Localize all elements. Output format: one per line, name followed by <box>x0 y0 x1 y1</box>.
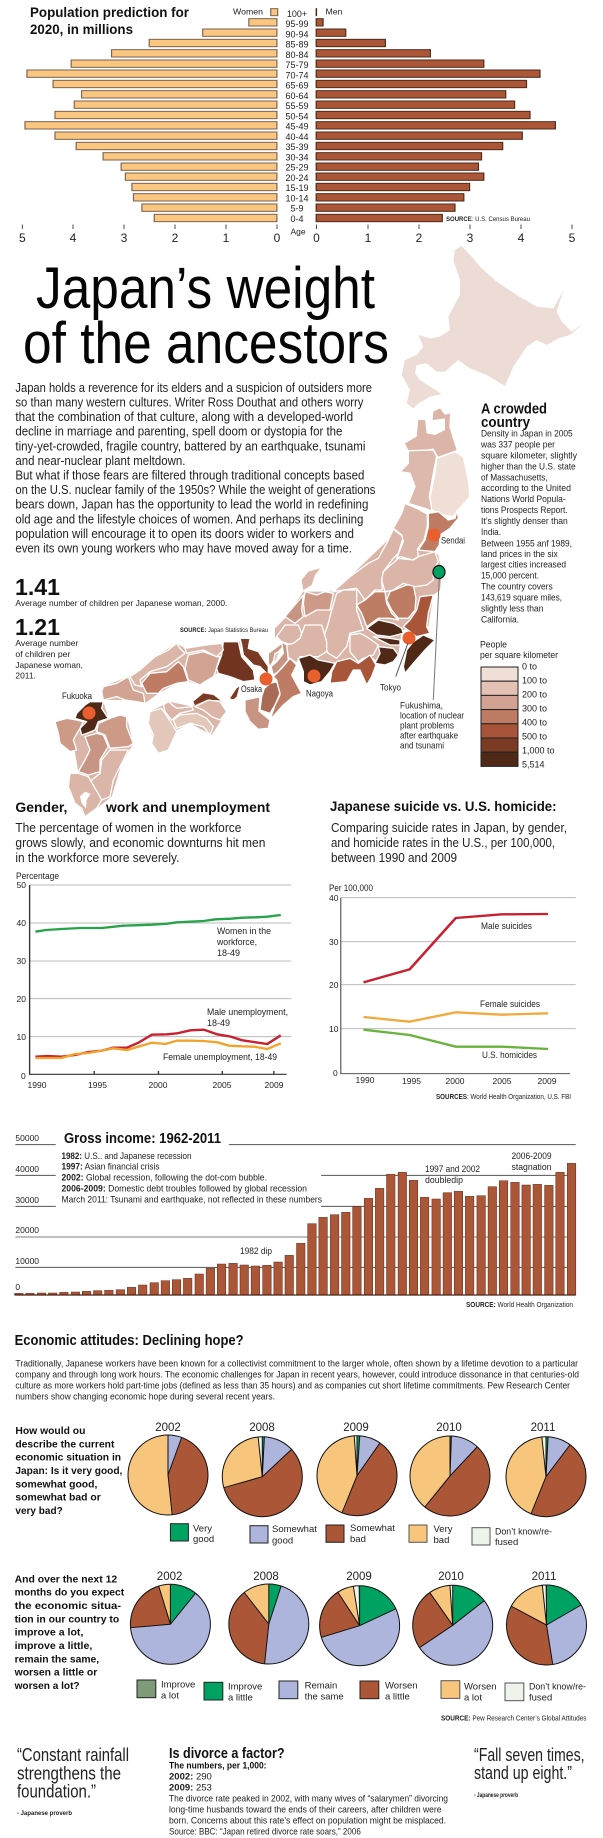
stat: 1.21 children: Japanese woman, <box>15 660 83 670</box>
legend row 2: Remain <box>305 1680 337 1692</box>
pyramid age labels: 60-64 <box>285 91 309 101</box>
sidebar: A crowded country: A crowded <box>481 402 547 418</box>
map: city labels: Sendai <box>441 536 465 546</box>
question 2: improve a lot, <box>15 1627 83 1639</box>
pyramid age labels: 90-94 <box>285 30 309 40</box>
intro text <box>15 380 376 556</box>
section: gender, work and unemployment <box>15 799 291 1090</box>
question 2: And over the next 12 <box>15 1573 117 1585</box>
sidebar: A crowded country: slightly less than <box>481 604 544 614</box>
quote: constant rainfall: foundation.” <box>17 1781 96 1801</box>
y axis labels: 50000 <box>15 1133 39 1143</box>
sidebar: A crowded country: country <box>481 415 530 431</box>
line chart: Per 100,000 <box>329 883 373 893</box>
pyramid axes: 4 <box>70 231 77 245</box>
chart annotations: 1982 dip <box>240 1246 272 1257</box>
sidebar: A crowded country: 15,000 percent. <box>481 570 539 582</box>
legend row 2: a lot <box>464 1692 482 1704</box>
legend row 1: good <box>193 1534 214 1545</box>
source: SOURCE: World Health Organization <box>466 1302 573 1309</box>
sidebar: A crowded country: India. <box>481 527 501 538</box>
quote: fall seven times: - Japanese proverb <box>474 1792 518 1799</box>
intro text: and near-nuclear plant meltdown. <box>15 453 185 468</box>
density legend: 1,000 to <box>522 746 555 756</box>
density legend: 400 to <box>522 718 547 728</box>
line chart: 10 <box>329 1024 339 1034</box>
map: southern Tohoku <box>333 503 458 600</box>
intro text: even its own young workers who may have moved away for a time. <box>15 541 352 556</box>
recession notes: 1997: Asian financial crisis <box>62 1162 160 1172</box>
map of Japan by population density <box>55 246 583 817</box>
legend row 1: Very <box>193 1524 212 1534</box>
sidebar: A crowded country: The country covers <box>481 581 553 592</box>
legend row 1: good <box>272 1536 293 1546</box>
pyramid age labels: 45-49 <box>285 122 309 132</box>
stat: 1.21 children <box>15 614 83 680</box>
pyramid heading: Population prediction for <box>30 4 190 20</box>
pyramid heading: 2020, in millions <box>30 21 133 37</box>
panel: is divorce a factor: born. Concerns about this rate’s effect on population might be misplaced. <box>169 1815 446 1825</box>
pyramid axes <box>19 224 576 245</box>
line chart: Female unemployment, 18-49 <box>163 1052 277 1062</box>
pie row 2: 2009: 2009 <box>346 1571 372 1583</box>
population pyramid <box>19 4 576 245</box>
map: Fukushima marker and leader lines <box>396 566 445 700</box>
sidebar: A crowded country: according to the United <box>481 483 571 494</box>
line chart <box>329 883 576 1086</box>
title <box>23 256 389 376</box>
question 1: describe the current <box>15 1438 115 1450</box>
line chart: Male suicides <box>481 921 532 931</box>
stat: 1.41 children <box>15 574 227 608</box>
legend row 1: Somewhat <box>350 1523 395 1534</box>
pyramid bars: women <box>25 9 278 222</box>
line chart: 30 <box>329 937 339 947</box>
pyramid age labels: 40-44 <box>285 132 309 142</box>
legend row 2: Improve <box>228 1682 262 1692</box>
pie row 1: 2011 <box>506 1422 586 1517</box>
legend row 2: fused <box>529 1692 552 1704</box>
panel: is divorce a factor: long-time husbands toward the ends of their careers, after children were <box>169 1805 442 1815</box>
sidebar: A crowded country <box>480 402 577 625</box>
pie row 2: 2011: 2011 <box>532 1571 556 1583</box>
panel: is divorce a factor: Is divorce a factor? <box>169 1746 285 1762</box>
pie row 1: 2009: 2009 <box>343 1422 369 1434</box>
map: Fukushima label: after earthquake <box>400 730 458 740</box>
map: Fukushima label <box>400 700 464 750</box>
intro text: Japan holds a reverence for its elders and a suspicion of outsiders more <box>15 380 372 395</box>
map: city labels: Nagoya <box>306 688 333 698</box>
sidebar: A crowded country: land prices in the six <box>481 549 558 560</box>
pyramid age labels: 100+ <box>287 9 307 19</box>
question 1: somewhat good, <box>15 1478 97 1490</box>
map: western Honshu, Shikoku and Kyushu <box>55 642 255 817</box>
line chart: Male unemployment, <box>207 1007 288 1017</box>
pyramid age labels: 55-59 <box>285 101 309 111</box>
intro text: tiny-yet-crowded, fragile country, battered by an earthquake, tsunami <box>15 438 365 453</box>
description: company and through long work hours. The economic challenges for Japan in recent years, however, could introduce dissonance in that centuries-old <box>15 1370 579 1380</box>
heading: work and unemployment <box>105 799 270 815</box>
recession notes: March 2011: Tsunami and earthquake, not reflected in these numbers <box>62 1195 322 1206</box>
pyramid age labels: 5-9 <box>290 204 304 214</box>
legend row 1: fused <box>495 1537 518 1548</box>
pie row 2: 2010 <box>413 1571 493 1665</box>
title: Japan’s weight <box>36 256 375 321</box>
legend row 2: a lot <box>161 1690 179 1702</box>
sidebar: A crowded country: of Massachusetts, <box>481 472 548 483</box>
sidebar: A crowded country: square kilometer, slightly <box>481 450 577 462</box>
map source: SOURCE: Japan Statistics Bureau <box>180 627 268 634</box>
legend row 1: Very <box>434 1524 453 1535</box>
pyramid age labels: 0-4 <box>290 214 304 224</box>
y axis labels: 10000 <box>15 1256 39 1266</box>
y axis labels: 0 <box>15 1282 20 1292</box>
sidebar: A crowded country: Nations World Popula- <box>481 494 566 505</box>
pyramid age labels <box>285 9 309 224</box>
pie row 1: 2002: 2002 <box>155 1422 181 1434</box>
question 2: tion in our country to <box>15 1613 119 1625</box>
sidebar: A crowded country: 143,619 square miles, <box>481 592 562 604</box>
line chart: 18-49 <box>207 1018 230 1028</box>
stat: 1.41 children: 1.41 <box>15 574 60 600</box>
pyramid axes: 3 <box>121 231 128 245</box>
pyramid source: SOURCE: U.S. Census Bureau <box>446 216 530 223</box>
stat: 1.21 children: of children per <box>15 649 71 659</box>
line chart: 1995 <box>88 1080 107 1090</box>
map: Fukushima label: location of nuclear <box>400 710 464 720</box>
question 2: improve a little, <box>15 1640 92 1652</box>
density legend: 500 to <box>522 732 547 742</box>
description: culture as more workers hold part-time jobs (defined as less than 35 hours) and as companies cut short lifetime commitments. Pew Research Center <box>15 1380 570 1390</box>
line chart: 40 <box>16 918 26 928</box>
question 2 <box>14 1573 125 1692</box>
line chart: Female suicides <box>480 999 540 1009</box>
description: between 1990 and 2009 <box>331 850 457 865</box>
stat: 1.21 children: 1.21 <box>15 614 60 640</box>
intro text: population will encourage it to open its doors wider to workers and <box>15 526 354 541</box>
density legend: 200 to <box>522 690 547 700</box>
pyramid age labels: 65-69 <box>285 80 309 90</box>
density legend: 5,514 <box>522 760 545 770</box>
question 2: worsen a lot? <box>14 1680 80 1692</box>
sidebar: A crowded country: tions Prospects Report. <box>481 505 568 516</box>
pyramid axes: 3 <box>467 231 474 245</box>
panel: is divorce a factor: The divorce rate peaked in 2002, with many wives of “salarymen” divorcing <box>169 1794 448 1804</box>
sidebar: A crowded country: higher than the U.S. state <box>481 461 576 472</box>
line chart: 2000 <box>446 1076 465 1086</box>
section: economic attitudes <box>14 1333 587 1722</box>
pie row 1: 2011: 2011 <box>531 1422 555 1434</box>
pie row 2: 2002 <box>130 1571 210 1664</box>
quote: fall seven times: stand up eight.” <box>474 1763 572 1783</box>
question 2: remain the same, <box>15 1653 99 1665</box>
pyramid axes: 4 <box>518 231 525 245</box>
panel: is divorce a factor: 2009: 253 <box>169 1783 212 1794</box>
description <box>15 820 265 865</box>
pyramid axes: 1 <box>365 231 372 245</box>
stat: 1.41 children: Average number of children per Japanese woman, 2000. <box>15 598 227 608</box>
intro text: But what if those fears are filtered through traditional concepts based <box>15 468 364 482</box>
pyramid age labels: 25-29 <box>285 162 309 172</box>
pie row 2: 2009 <box>320 1571 400 1666</box>
legend row 2 <box>137 1680 586 1704</box>
map: Fukushima label: and tsunami <box>400 740 444 750</box>
density legend: 300 to <box>522 704 547 714</box>
line chart: Women in the <box>217 926 271 936</box>
pie row 1: 2009 <box>317 1422 397 1516</box>
line chart: 20 <box>16 994 26 1004</box>
description: in the workforce more severely. <box>15 850 179 865</box>
pyramid age labels: 30-34 <box>285 152 309 162</box>
density legend: 100 to <box>522 676 547 686</box>
map: city labels: Tokyo <box>380 682 401 692</box>
line chart: 1990 <box>356 1075 375 1085</box>
quote: constant rainfall: strengthens the <box>17 1763 121 1783</box>
line chart: Percentage <box>16 871 59 881</box>
pie row 1: 2008: 2008 <box>249 1422 275 1434</box>
pie row 1: 2008 <box>222 1422 302 1517</box>
source: SOURCE: Pew Research Center’s Global Attitudes <box>441 1716 587 1722</box>
recession notes: 2002: Global recession, following the dot-com bubble. <box>62 1173 267 1184</box>
map: Hokkaido and northern Tohoku <box>400 246 583 517</box>
recession notes: 2006-2009: Domestic debt troubles followed by global recession <box>62 1184 307 1195</box>
pyramid age labels: 50-54 <box>285 112 309 122</box>
description <box>15 1359 579 1401</box>
legend row 2: the same <box>305 1692 344 1702</box>
legend row 1: bad <box>434 1535 449 1546</box>
pie row 2: 2008 <box>229 1571 309 1664</box>
map: Fukushima label: Fukushima, <box>400 700 443 710</box>
line chart: 0 <box>21 1071 26 1081</box>
stat: 1.21 children: Average number <box>15 638 79 648</box>
legend row 2: a little <box>385 1692 410 1702</box>
map: Kansai and Tokai <box>240 625 335 729</box>
pie row 2: 2011 <box>506 1571 586 1665</box>
recession notes: 1982: U.S.. and Japanese recession <box>62 1151 192 1162</box>
pie row 2: 2008: 2008 <box>253 1571 279 1583</box>
pyramid age labels: 85-89 <box>285 40 309 50</box>
heading: Gross income: 1962-2011 <box>64 1131 221 1147</box>
pyramid axes: 5 <box>19 231 26 245</box>
density legend: per square kilometer <box>480 650 558 661</box>
pyramid axes: 0 <box>313 231 320 245</box>
map: central Honshu <box>275 528 442 685</box>
legend row 2: Worsen <box>464 1682 497 1692</box>
question 2: the economic situa- <box>15 1600 122 1612</box>
title: of the ancestors <box>23 311 389 376</box>
map: city labels: Osaka <box>241 684 262 694</box>
heading: Japanese suicide vs. U.S. homicide: <box>330 798 556 814</box>
heading <box>15 799 270 815</box>
pyramid age labels: 20-24 <box>285 173 309 183</box>
question 1: How would ou <box>15 1425 85 1437</box>
line chart: 2009 <box>265 1080 284 1090</box>
map: city markers <box>82 528 440 720</box>
legend row 1: Don’t know/re- <box>495 1526 552 1538</box>
description: The percentage of women in the workforce <box>15 820 241 835</box>
intro text: bears down, Japan has the opportunity to lead the world in redefining <box>15 497 368 512</box>
pyramid axes: 2 <box>416 231 423 245</box>
pyramid axes: 0 <box>274 231 281 245</box>
sidebar: A crowded country: Between 1955 anf 1989, <box>481 539 572 550</box>
line chart: 10 <box>16 1032 26 1042</box>
pyramid axes: 2 <box>172 231 179 245</box>
line chart: 30 <box>16 956 26 966</box>
line chart: 2005 <box>213 1080 232 1090</box>
line chart: 18-49 <box>217 948 240 958</box>
recession notes <box>62 1151 322 1206</box>
pyramid legend labels <box>233 6 343 236</box>
line chart <box>16 871 291 1090</box>
panel: is divorce a factor <box>169 1746 448 1836</box>
line chart: U.S. homicides <box>482 1050 537 1060</box>
line chart: 50 <box>16 880 26 890</box>
description: Traditionally, Japanese workers have been known for a collectivist commitment to the larger whole, often shown by a lifetime devotion to a particular <box>15 1359 578 1369</box>
pyramid axes: 5 <box>569 231 576 245</box>
heading: Gender, <box>15 799 67 815</box>
pyramid age labels: 10-14 <box>285 194 309 204</box>
y axis labels <box>15 1133 39 1292</box>
line chart: 1990 <box>28 1080 47 1090</box>
density legend: 0 to <box>522 662 537 672</box>
line chart: 0 <box>333 1068 338 1078</box>
description: grows slowly, and economic downturns hit men <box>15 835 265 850</box>
density legend: People <box>480 640 507 650</box>
pyramid age labels: 15-19 <box>285 183 309 193</box>
map: city labels: Fukuoka <box>62 691 92 701</box>
question 2: worsen a little or <box>14 1667 97 1679</box>
density legend <box>480 640 558 770</box>
line chart: 2009 <box>538 1076 557 1086</box>
chart annotations: 1997 and 2002 <box>425 1164 480 1175</box>
section: suicide vs homicide <box>329 798 576 1101</box>
pyramid heading <box>30 4 190 37</box>
pie row 2: 2002: 2002 <box>157 1571 182 1583</box>
map: city labels <box>62 536 465 701</box>
sidebar: A crowded country: largest cities increased <box>481 560 566 571</box>
line chart: 2000 <box>149 1080 168 1090</box>
y axis labels: 30000 <box>15 1195 39 1205</box>
map: Fukushima label: plant problems <box>400 720 454 730</box>
line chart: 1995 <box>402 1076 421 1086</box>
panel: is divorce a factor: The numbers, per 1,000: <box>169 1761 266 1772</box>
intro text: on the U.S. nuclear family of the 1950s? While the weight of generations <box>15 482 376 497</box>
line chart: 2005 <box>493 1076 512 1086</box>
intro text: that the combination of that culture, along with a developed-world <box>15 409 353 424</box>
chart annotations: 2006-2009 <box>512 1151 552 1162</box>
quote: fall seven times <box>474 1745 585 1799</box>
line chart: 20 <box>329 980 339 990</box>
intro text: old age and the lifestyle choices of women. And perhaps its declining <box>15 511 363 526</box>
pie row 1: 2002 <box>128 1422 208 1515</box>
section: gross income <box>15 1131 576 1309</box>
legend row 2: a little <box>228 1692 253 1704</box>
legend row 1: Somewhat <box>272 1524 317 1535</box>
description <box>331 820 567 865</box>
line chart: 40 <box>329 893 339 903</box>
pie row 1: 2010: 2010 <box>436 1422 462 1434</box>
sidebar: A crowded country: It’s slightly denser than <box>481 516 568 527</box>
legend row 2: Don’t know/re- <box>529 1682 586 1692</box>
heading: Economic attitudes: Declining hope? <box>15 1333 244 1349</box>
description: numbers show changing economic hope during several recent years. <box>15 1391 275 1401</box>
pie row 1: 2010 <box>410 1422 490 1516</box>
pyramid legend labels: Women <box>233 6 263 16</box>
pyramid age labels: 75-79 <box>285 60 309 70</box>
pyramid age labels: 95-99 <box>285 19 309 29</box>
question 1: economic situation in <box>15 1452 121 1464</box>
bar chart <box>15 1145 576 1295</box>
legend row 1 <box>170 1523 552 1548</box>
question 1 <box>15 1425 122 1517</box>
quote: constant rainfall: - Japanese proverb <box>17 1810 72 1817</box>
pyramid legend labels: Age <box>290 226 306 236</box>
legend row 2: Improve <box>161 1680 195 1690</box>
legend row 1: bad <box>350 1534 366 1545</box>
pyramid legend labels: Men <box>326 6 343 16</box>
description: and homicide rates in the U.S., per 100,000, <box>331 835 555 850</box>
panel: is divorce a factor: Source: BBC: “Japan retired divorce rate soars,” 2006 <box>169 1826 361 1836</box>
pyramid axes: 1 <box>223 231 230 245</box>
intro text: decline in marriage and parenting, spell doom or dystopia for the <box>15 424 342 439</box>
source: SOURCES: World Health Organization, U.S. FBI <box>436 1094 571 1101</box>
line chart: workforce, <box>216 937 257 947</box>
question 1: somewhat bad or <box>15 1492 101 1504</box>
question 1: very bad? <box>15 1505 63 1517</box>
pyramid age labels: 35-39 <box>285 142 309 152</box>
sidebar: A crowded country: was 337 people per <box>480 440 556 451</box>
y axis labels: 20000 <box>15 1225 39 1235</box>
quote: constant rainfall: “Constant rainfall <box>17 1745 129 1765</box>
quote: constant rainfall <box>17 1745 129 1817</box>
sidebar: A crowded country: California. <box>481 614 519 625</box>
y axis labels: 40000 <box>15 1164 39 1174</box>
chart annotations: stagnation <box>512 1162 552 1173</box>
panel: is divorce a factor: 2002: 290 <box>169 1772 212 1782</box>
pyramid age labels: 80-84 <box>285 50 309 60</box>
description: Comparing suicide rates in Japan, by gender, <box>331 820 567 835</box>
question 1: Japan: Is it very good, <box>15 1465 122 1477</box>
intro text: so than many western cultures. Writer Ross Douthat and others worry <box>15 394 364 410</box>
question 2: months do you expect <box>15 1587 125 1599</box>
sidebar: A crowded country: Density in Japan in 2005 <box>481 429 573 440</box>
legend row 2: Worsen <box>385 1680 418 1692</box>
stat: 1.21 children: 2011. <box>15 670 36 680</box>
pie row 2: 2010: 2010 <box>438 1571 464 1583</box>
chart annotations: doubledip <box>425 1175 463 1186</box>
chart annotations <box>240 1151 552 1257</box>
pyramid age labels: 70-74 <box>285 70 309 80</box>
pyramid bars: men <box>316 9 555 222</box>
